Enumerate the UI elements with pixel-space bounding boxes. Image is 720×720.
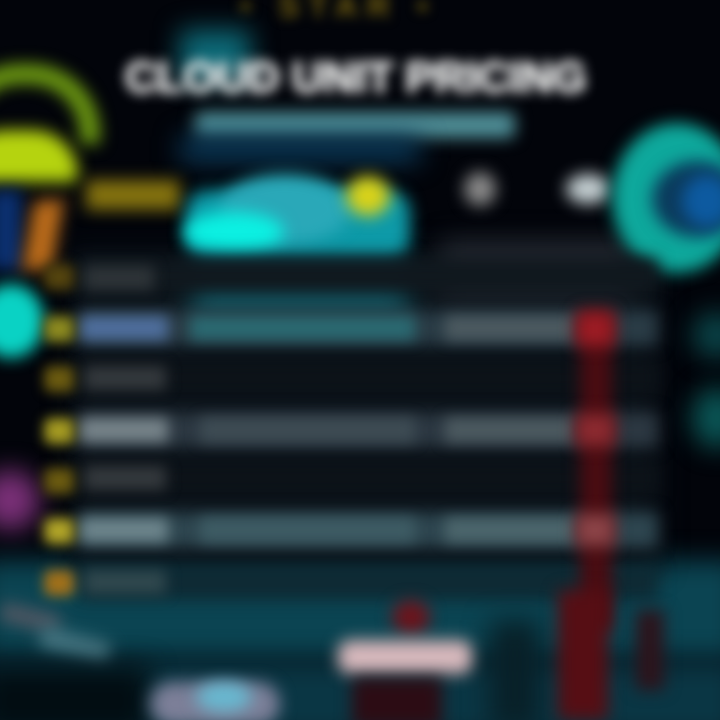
row labels <box>73 262 574 599</box>
cloud body <box>186 190 410 260</box>
panel: bottom illustrations <box>0 582 672 720</box>
icon: green arc <box>0 64 100 144</box>
row 2 <box>78 310 658 346</box>
ring disc <box>612 123 720 273</box>
row 4 values <box>200 418 415 442</box>
gold marker 3 <box>44 366 74 392</box>
dark teal column <box>490 620 540 720</box>
red highlight 4 <box>576 414 614 446</box>
label 5 <box>84 466 166 490</box>
title: CLOUD UNIT PRICING <box>125 54 587 102</box>
pale blob <box>150 682 280 720</box>
gold header cell <box>86 180 180 210</box>
dark mid table background <box>70 250 660 570</box>
label 7 <box>84 570 166 594</box>
icon: teal ring <box>601 112 720 284</box>
cloud bright peak <box>220 174 350 244</box>
label 1 <box>84 266 154 290</box>
header column dim block <box>440 240 630 300</box>
lower dark background <box>0 660 720 720</box>
red column <box>580 310 612 630</box>
column header icon: white dot <box>464 172 496 206</box>
gold marker 6 <box>44 518 74 544</box>
row 6 <box>78 512 658 548</box>
row 7 <box>78 564 658 600</box>
row 3 <box>78 360 658 396</box>
right teal blob 2 <box>692 388 720 448</box>
dark red base <box>352 678 442 720</box>
pale blue core <box>196 682 252 712</box>
panel: left decoration <box>0 52 112 546</box>
subtitle <box>195 112 515 138</box>
icon: cyan blob <box>0 284 44 358</box>
row 5 <box>78 460 658 496</box>
label 4 <box>80 418 168 442</box>
right teal blob 1 <box>692 312 720 358</box>
row 4 right values <box>445 418 575 442</box>
lower teal background <box>0 560 720 660</box>
icon: purple blob <box>0 470 40 530</box>
red highlight 2 <box>576 312 614 346</box>
ring centre <box>682 175 720 227</box>
left pale streak lower <box>38 626 112 664</box>
row 2 values <box>190 316 415 340</box>
row 6 right values <box>445 518 575 542</box>
label 2 <box>80 316 168 340</box>
ring inner <box>652 161 720 237</box>
gold marker 2 <box>44 316 74 342</box>
subtitle lower glow <box>180 136 420 162</box>
dark lower-left corner <box>0 666 150 720</box>
label 6 <box>80 518 168 542</box>
label 3 <box>84 366 166 390</box>
gold marker 5 <box>44 468 74 494</box>
white band <box>338 640 473 674</box>
row 1 <box>78 258 658 294</box>
icon: orange block <box>22 200 64 270</box>
row 4 <box>78 412 658 448</box>
red figure <box>558 590 608 720</box>
gold marker 7 <box>44 570 74 596</box>
red top shape <box>392 600 430 634</box>
left pale streak <box>0 601 62 635</box>
gold marker 1 <box>44 264 74 290</box>
row 2 right values <box>445 316 575 340</box>
cloud bright core <box>184 212 284 252</box>
icon: cyan cloud <box>172 162 422 315</box>
icon: blue block <box>0 190 22 270</box>
red highlight 6 <box>576 514 614 546</box>
cloud reflection <box>192 264 408 320</box>
red figure right <box>636 610 664 690</box>
title glow <box>180 30 250 80</box>
gold marker 4 <box>44 418 74 444</box>
row 6 values <box>200 518 415 542</box>
icon: yellow circle <box>346 176 390 216</box>
panel: pricing table <box>35 245 668 633</box>
column header icon: white arrow <box>566 174 610 204</box>
icon: bright yellow arc <box>0 130 78 182</box>
